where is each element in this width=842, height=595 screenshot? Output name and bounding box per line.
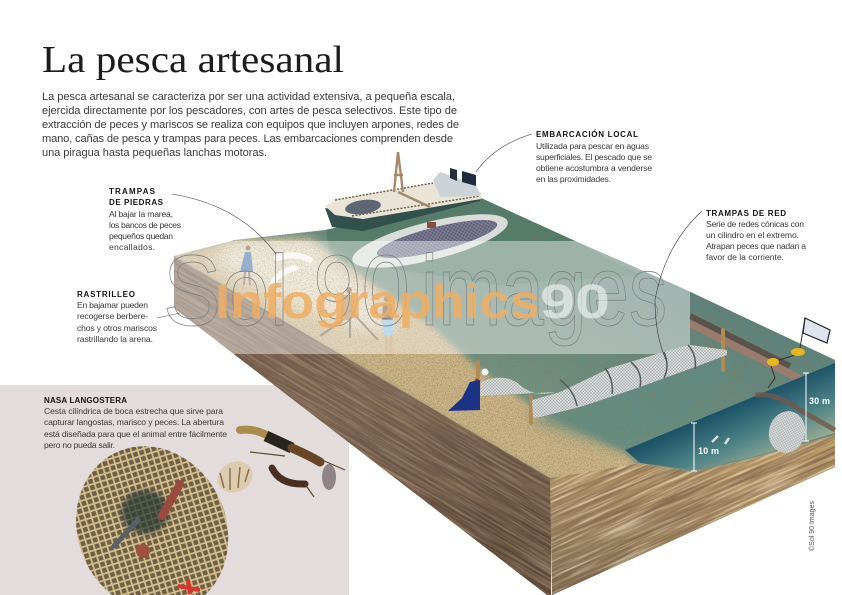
callout: trampas de red: Atrapan peces que nadan a xyxy=(706,241,806,251)
intro paragraph: ejercida directamente por los pescadores, con artes de pesca selectivos. Este tipo de xyxy=(42,105,457,117)
intro paragraph: mano, cañas de pesca y trampas para peces. Las embarcaciones comprenden desde xyxy=(42,133,453,145)
callout: trampas de piedras: encallados. xyxy=(109,242,155,252)
callout: nasa langostera: capturar langostas, marisco y peces. La abertura xyxy=(44,417,224,427)
diorama: coastal block xyxy=(170,190,840,595)
callout: trampas de red xyxy=(655,209,806,360)
callout: rastrilleo: chos y otros mariscos xyxy=(77,323,157,333)
callout: rastrilleo: En bajamar pueden xyxy=(77,300,148,310)
seabed stripe xyxy=(690,316,800,379)
sol 90 watermark: Infographics xyxy=(215,276,540,329)
callout: nasa langostera xyxy=(44,396,227,450)
sol 90 watermark xyxy=(163,235,690,354)
sol 90 watermark: images xyxy=(421,235,667,347)
icon: lobster trap xyxy=(76,446,228,595)
callout: embarcación local: obtiene acostumbra a venderse xyxy=(536,163,652,173)
depth marker: 30 m: 30 m xyxy=(809,396,830,406)
figure: woman on beach xyxy=(240,246,253,285)
callout: rastrilleo: rastrillando la arena. xyxy=(77,334,153,344)
figure: man raking xyxy=(320,287,378,340)
callout: rastrilleo: recogerse berbere- xyxy=(77,311,148,321)
left face of the block xyxy=(174,256,551,595)
water cross-section xyxy=(625,363,835,470)
callout: embarcación local: superficiales. El pescado que se xyxy=(536,152,652,162)
callout: embarcación local: EMBARCACIÓN LOCAL xyxy=(536,130,638,139)
poles xyxy=(478,330,723,423)
callout: trampas de red: TRAMPAS DE RED xyxy=(706,209,786,218)
callout: nasa langostera: Cesta cilíndrica de boca estrecha que sirve para xyxy=(44,406,223,416)
intro paragraph xyxy=(42,91,459,159)
net enclosure on water xyxy=(348,203,512,279)
title: La pesca artesanal xyxy=(42,39,344,81)
callout: embarcación local: Utilizada para pescar en aguas xyxy=(536,141,649,151)
copyright: ©Sol 90 Images xyxy=(808,500,816,551)
panel: nasa langostera background xyxy=(0,385,349,595)
buoys and flag xyxy=(767,318,830,388)
callout: rastrilleo: RASTRILLEO xyxy=(77,290,135,299)
figure: woman standing xyxy=(382,296,393,356)
callout: embarcación local xyxy=(476,130,652,184)
callout: trampas de red: favor de la corriente. xyxy=(706,252,784,262)
right face of the block xyxy=(550,351,835,595)
callout: trampas de piedras: los bancos de peces xyxy=(109,220,181,230)
seabed stripe in cross-section xyxy=(755,395,835,430)
sol 90 watermark: 90 xyxy=(540,276,610,329)
intro paragraph: extracción de peces y mariscos se realiza con equipos que incluyen arpones, redes de xyxy=(42,119,459,131)
icon: small fish in section xyxy=(712,436,729,444)
icon: lobster xyxy=(240,430,345,497)
callout: trampas de piedras: Al bajar la marea, xyxy=(109,209,173,219)
callout: trampas de red: Serie de redes cónicas con xyxy=(706,219,804,229)
net bag on seabed xyxy=(764,407,810,457)
conical net trap xyxy=(480,345,727,418)
callout: embarcación local: en las proximidades. xyxy=(536,174,611,184)
depth marker: 10 m xyxy=(691,423,719,471)
sol 90 watermark: Sol 90 xyxy=(163,235,410,347)
callout: trampas de piedras: TRAMPAS xyxy=(109,187,156,196)
callout: nasa langostera: pero no pueda salir. xyxy=(44,440,115,450)
callout: trampas de piedras: pequeños quedan xyxy=(109,231,173,241)
callout: rastrilleo xyxy=(77,290,180,344)
icon: cockle shell xyxy=(212,456,258,498)
depth marker: 30 m xyxy=(803,373,830,441)
callout: trampas de red: un cilindro en el extremo. xyxy=(706,230,799,240)
intro paragraph: La pesca artesanal se caracteriza por ser una actividad extensiva, a pequeña escala, xyxy=(42,91,455,103)
callout: trampas de piedras: DE PIEDRAS xyxy=(109,198,164,207)
depth marker: 10 m: 10 m xyxy=(698,446,719,456)
callout: nasa langostera: está diseñada para que el animal entre fácilmente xyxy=(44,429,227,439)
callout: trampas de piedras xyxy=(109,187,276,254)
callout: nasa langostera: NASA LANGOSTERA xyxy=(44,396,127,405)
intro paragraph: una piragua hasta pequeñas lanchas motoras. xyxy=(42,147,267,159)
icon: fishing boat xyxy=(325,152,481,231)
figure: kneeling fisherman xyxy=(448,368,488,411)
stone trap walls xyxy=(272,255,310,285)
top surface: sea and beach xyxy=(170,190,840,490)
